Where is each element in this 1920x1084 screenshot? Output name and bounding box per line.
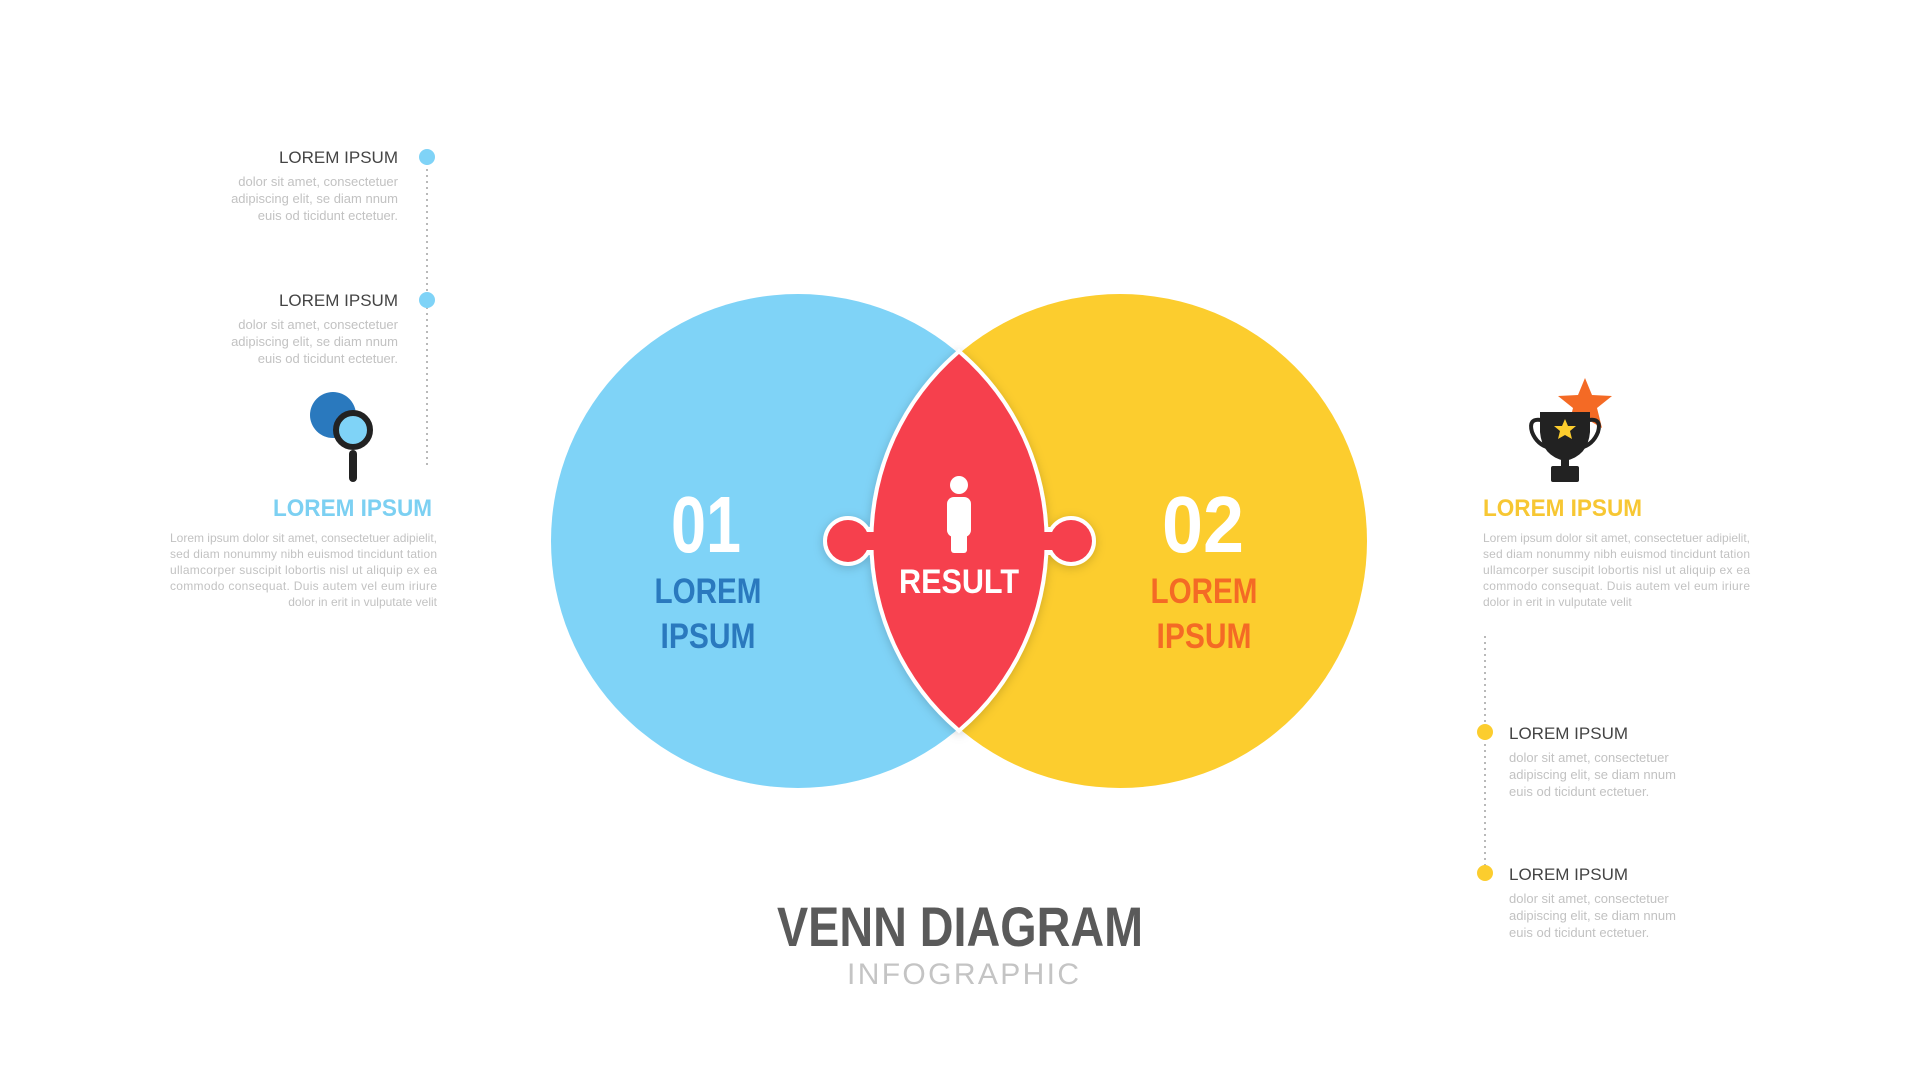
- title: [777, 895, 1143, 991]
- right timeline: [1477, 636, 1676, 940]
- left item 2: LOREM IPSUM: [279, 291, 398, 310]
- left panel text: LOREM IPSUM: [273, 495, 432, 522]
- right panel text: [1483, 495, 1750, 609]
- left timeline: [231, 148, 435, 467]
- left item 1: LOREM IPSUM: [279, 148, 398, 167]
- right panel text: sed diam nonummy nibh euismod tincidunt tation: [1483, 547, 1750, 561]
- right panel text: LOREM IPSUM: [1483, 495, 1642, 522]
- left panel text: sed diam nonummy nibh euismod tincidunt tation: [170, 547, 437, 561]
- label 01: IPSUM: [660, 617, 756, 656]
- label 01: 01: [671, 480, 741, 569]
- result label: RESULT: [899, 563, 1019, 601]
- left item 2: euis od ticidunt ectetuer.: [258, 351, 398, 366]
- right item 1: adipiscing elit, se diam nnum: [1509, 767, 1676, 782]
- left item 2: adipiscing elit, se diam nnum: [231, 334, 398, 349]
- right item 1: dolor sit amet, consectetuer: [1509, 750, 1669, 765]
- right item 2: euis od ticidunt ectetuer.: [1509, 925, 1649, 940]
- right item 2: LOREM IPSUM: [1509, 865, 1628, 884]
- left panel text: commodo consequat. Duis autem vel eum iriure: [170, 579, 437, 593]
- right item 2: adipiscing elit, se diam nnum: [1509, 908, 1676, 923]
- left item 1: [231, 148, 435, 223]
- left panel text: dolor in erit in vulputate velit: [288, 595, 438, 609]
- label 02: 02: [1162, 480, 1244, 569]
- circle 02: [873, 294, 1367, 788]
- label 01: LOREM: [654, 572, 762, 611]
- label 02: IPSUM: [1156, 617, 1252, 656]
- title: VENN DIAGRAM: [777, 895, 1143, 958]
- left item 2: dolor sit amet, consectetuer: [238, 317, 399, 332]
- left panel text: ullamcorper suscipit lobortis nisl ut aliquip ex ea: [170, 563, 437, 577]
- icon: magnifier: [310, 392, 370, 482]
- icon: trophy: [1531, 378, 1612, 482]
- right item 1: euis od ticidunt ectetuer.: [1509, 784, 1649, 799]
- left item 1: euis od ticidunt ectetuer.: [258, 208, 398, 223]
- left item 1: adipiscing elit, se diam nnum: [231, 191, 398, 206]
- right panel text: ullamcorper suscipit lobortis nisl ut aliquip ex ea: [1483, 563, 1750, 577]
- circle 01: [551, 294, 1045, 788]
- venn diagram: [551, 294, 1367, 788]
- result lens: [827, 354, 1092, 728]
- icon: person: [947, 476, 971, 553]
- left item 1: dolor sit amet, consectetuer: [238, 174, 399, 189]
- right panel text: commodo consequat. Duis autem vel eum iriure: [1483, 579, 1750, 593]
- label 02: LOREM: [1150, 572, 1258, 611]
- left panel text: Lorem ipsum dolor sit amet, consectetuer adipielit,: [170, 531, 437, 545]
- left panel text: [170, 495, 438, 609]
- right item 2: [1477, 865, 1676, 940]
- right panel text: Lorem ipsum dolor sit amet, consectetuer adipielit,: [1483, 531, 1750, 545]
- left item 2: [231, 291, 435, 366]
- right item 2: dolor sit amet, consectetuer: [1509, 891, 1669, 906]
- right panel text: dolor in erit in vulputate velit: [1483, 595, 1632, 609]
- subtitle: INFOGRAPHIC: [847, 958, 1079, 991]
- label 01: [654, 480, 762, 656]
- right item 1: [1477, 724, 1676, 799]
- label 02: [1150, 480, 1258, 656]
- right item 1: LOREM IPSUM: [1509, 724, 1628, 743]
